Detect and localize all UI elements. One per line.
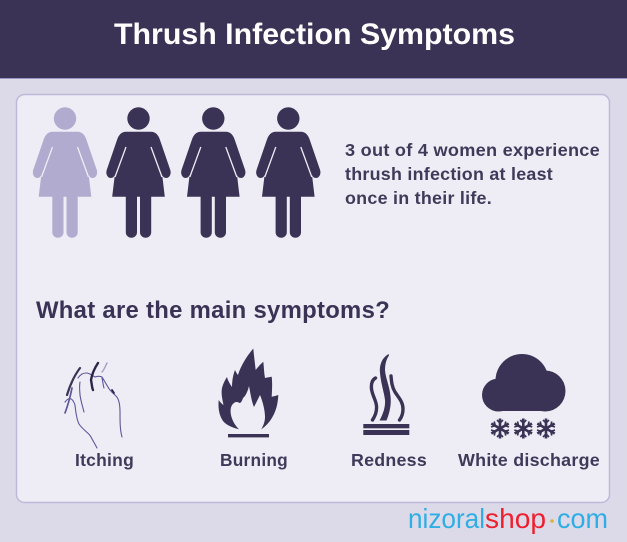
statistic text block: 3 out of 4 women experience [345, 140, 600, 160]
statistic text block: thrush infection at least [345, 164, 553, 184]
logo: nizoralshop.com: nizoral [408, 503, 485, 534]
icon: woman, dark 2 [181, 107, 245, 238]
statistic text block [345, 140, 600, 208]
icon: flame [218, 348, 278, 437]
label: Itching: Itching [75, 450, 134, 470]
label: White discharge: White discharge [458, 450, 600, 470]
section heading: What are the main symptoms? [36, 297, 390, 324]
panel: main content [16, 94, 610, 502]
title: Thrush Infection Symptoms [114, 18, 515, 51]
icon: rising heat over bars [363, 354, 409, 435]
header band [0, 0, 627, 79]
icon: woman, dark 3 [256, 107, 320, 238]
icon: cloud with snowflakes [482, 354, 566, 438]
label: Burning: Burning [220, 450, 288, 470]
icon: scratching hand [65, 363, 122, 448]
label: Redness: Redness [351, 450, 427, 470]
logo: nizoralshop.com: shop [485, 503, 546, 534]
statistic text block: once in their life. [345, 188, 492, 208]
icon: woman, dark 1 [106, 107, 171, 238]
logo: nizoralshop.com [408, 503, 608, 534]
icon row: four women, one in four shown pale [33, 107, 320, 238]
icon: woman, pale [33, 107, 97, 238]
logo: nizoralshop.com: com [557, 503, 608, 534]
